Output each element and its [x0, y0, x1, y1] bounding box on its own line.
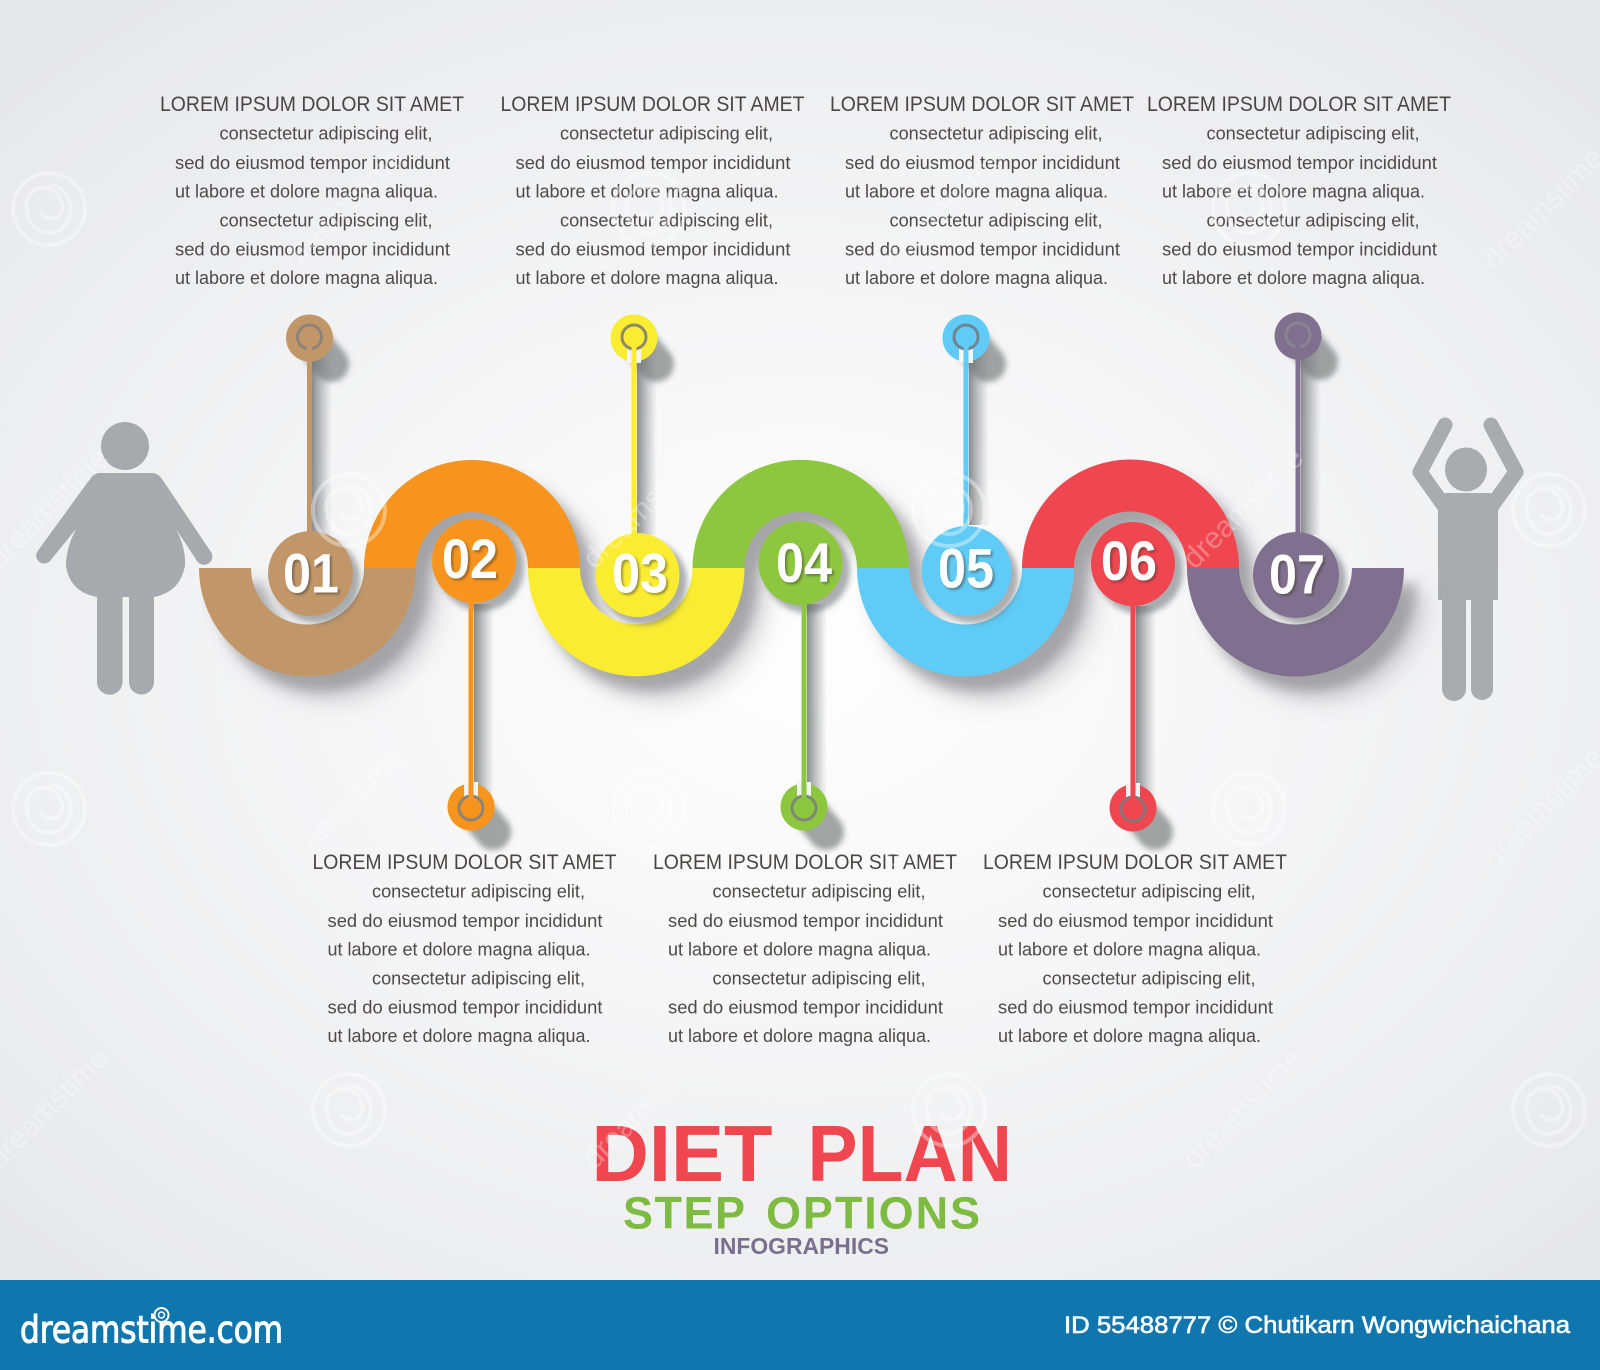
subtitle: step options — [623, 1188, 980, 1238]
step 05 — [922, 314, 1012, 616]
text block 5: sed do eiusmod tempor incididunt — [845, 153, 1120, 173]
step 07 — [1253, 312, 1339, 618]
segment 1 brown — [199, 568, 416, 676]
wave shadow — [212, 474, 1428, 702]
icon: fit person with raised arms — [1420, 425, 1516, 701]
watermark layer — [0, 141, 1600, 1175]
text block 1: ut labore et dolore magna aliqua. — [175, 268, 438, 288]
text block 2: ut labore et dolore magna aliqua. — [328, 1026, 590, 1046]
title: diet plan: DIET — [592, 1109, 773, 1198]
watermark layer: dreamstime — [576, 441, 710, 575]
text block 3 — [500, 93, 805, 288]
text block 5: consectetur adipiscing elit, — [890, 210, 1102, 230]
watermark layer: dreamstime — [1176, 1041, 1310, 1175]
text block 6: sed do eiusmod tempor incididunt — [998, 998, 1273, 1018]
disc 07 — [1253, 532, 1339, 618]
subtitle: step options: OPTIONS — [766, 1188, 980, 1238]
text block 2: ut labore et dolore magna aliqua. — [328, 940, 590, 960]
text block 7: ut labore et dolore magna aliqua. — [1162, 182, 1425, 202]
number 04: 04 — [776, 531, 832, 594]
text block 1: sed do eiusmod tempor incididunt — [175, 153, 450, 173]
disc 01 — [268, 531, 353, 616]
text block 7: LOREM IPSUM DOLOR SIT AMET — [1147, 93, 1451, 116]
segment 3 yellow — [528, 568, 744, 676]
number 06: 06 — [1101, 529, 1157, 592]
text block 1: ut labore et dolore magna aliqua. — [175, 182, 438, 202]
text block 7 — [1147, 93, 1451, 288]
footer credit: ID 55488777 © Chutikarn Wongwichaichana — [1064, 1312, 1571, 1339]
text block 5: ut labore et dolore magna aliqua. — [845, 268, 1108, 288]
pin 04 — [780, 600, 828, 830]
number 07: 07 — [1269, 542, 1325, 606]
pin 01 — [286, 314, 333, 534]
text block 2: consectetur adipiscing elit, — [372, 968, 585, 988]
step 06 — [1091, 522, 1175, 832]
watermark layer: dreamstime — [1176, 441, 1310, 575]
text block 7: ut labore et dolore magna aliqua. — [1162, 268, 1425, 288]
pin 06 — [1110, 600, 1156, 832]
text block 3: ut labore et dolore magna aliqua. — [516, 182, 778, 202]
text block 7: sed do eiusmod tempor incididunt — [1162, 240, 1437, 260]
text block 3: consectetur adipiscing elit, — [560, 124, 773, 144]
winding ribbon — [199, 460, 1404, 676]
step 02 — [432, 519, 516, 830]
disc 02 — [432, 519, 516, 603]
footer logo: dreamstime.com — [20, 1308, 283, 1352]
text block 3: ut labore et dolore magna aliqua. — [516, 268, 778, 288]
step 04 — [758, 521, 842, 830]
text block 6 — [983, 851, 1287, 1046]
pin shadows — [311, 338, 1321, 832]
text block 4: sed do eiusmod tempor incididunt — [668, 998, 943, 1018]
text block 1: sed do eiusmod tempor incididunt — [175, 240, 450, 260]
text block 5: LOREM IPSUM DOLOR SIT AMET — [830, 93, 1134, 116]
pin 05 — [942, 314, 990, 530]
number 05: 05 — [938, 536, 994, 600]
text block 6: ut labore et dolore magna aliqua. — [998, 1026, 1261, 1046]
text block 5: sed do eiusmod tempor incididunt — [845, 240, 1120, 260]
disc 05 — [922, 526, 1012, 616]
watermark layer: dreamstime — [276, 741, 410, 875]
text block 7: consectetur adipiscing elit, — [1206, 124, 1420, 144]
text block 7: sed do eiusmod tempor incididunt — [1162, 153, 1437, 173]
disc 03 — [596, 533, 680, 617]
text block 4: consectetur adipiscing elit, — [712, 882, 926, 902]
text block 2: sed do eiusmod tempor incididunt — [328, 911, 602, 931]
text block 4: LOREM IPSUM DOLOR SIT AMET — [653, 851, 957, 874]
text block 1: consectetur adipiscing elit, — [220, 210, 432, 230]
step 03 — [596, 314, 680, 617]
text block 2: consectetur adipiscing elit, — [372, 882, 585, 902]
number 02: 02 — [442, 527, 498, 590]
watermark layer: dreamstime — [576, 1041, 710, 1175]
text block 1 — [160, 93, 464, 288]
subtitle: step options: STEP — [623, 1188, 745, 1238]
watermark layer: dreamstime — [876, 741, 1010, 875]
text block 1: LOREM IPSUM DOLOR SIT AMET — [160, 93, 464, 116]
text block 6: consectetur adipiscing elit, — [1042, 968, 1256, 988]
text block 4 — [653, 851, 957, 1046]
text block 4: sed do eiusmod tempor incididunt — [668, 911, 943, 931]
text block 6: consectetur adipiscing elit, — [1042, 882, 1256, 902]
text block 5 — [830, 93, 1134, 288]
text block 2: LOREM IPSUM DOLOR SIT AMET — [312, 851, 617, 874]
text block 1: consectetur adipiscing elit, — [220, 124, 432, 144]
pin 03 — [610, 314, 658, 537]
disc 04 — [758, 521, 842, 605]
number 01: 01 — [283, 542, 339, 604]
number 03: 03 — [612, 542, 668, 604]
step 01 — [268, 314, 353, 616]
text block 6: ut labore et dolore magna aliqua. — [998, 940, 1261, 960]
text block 3: sed do eiusmod tempor incididunt — [516, 240, 790, 260]
segment 5 blue — [857, 568, 1074, 676]
text block 4: ut labore et dolore magna aliqua. — [668, 940, 931, 960]
text block 5: ut labore et dolore magna aliqua. — [845, 182, 1108, 202]
text block 5: consectetur adipiscing elit, — [890, 124, 1102, 144]
number disc shadows — [274, 525, 1346, 625]
text block 3: consectetur adipiscing elit, — [560, 210, 773, 230]
disc 06 — [1091, 522, 1175, 606]
text block 2 — [312, 851, 617, 1046]
footer bar — [0, 1280, 1600, 1370]
segment 6 red — [1022, 460, 1239, 568]
icon: overweight person — [36, 422, 212, 695]
pin 07 — [1274, 312, 1322, 536]
pin 02 — [448, 600, 494, 830]
segment 4 green — [692, 460, 909, 568]
title: diet plan — [592, 1109, 1012, 1198]
text block 4: consectetur adipiscing elit, — [712, 968, 926, 988]
title: diet plan: PLAN — [808, 1109, 1012, 1198]
text block 3: LOREM IPSUM DOLOR SIT AMET — [500, 93, 805, 116]
text block 6: LOREM IPSUM DOLOR SIT AMET — [983, 851, 1287, 874]
subtitle: infographics: INFOGRAPHICS — [714, 1233, 889, 1259]
segment 7 purple — [1187, 568, 1404, 676]
text block 2: sed do eiusmod tempor incididunt — [328, 998, 602, 1018]
watermark layer: dreamstime — [876, 141, 1010, 275]
text block 7: consectetur adipiscing elit, — [1206, 210, 1420, 230]
watermark layer: dreamstime — [276, 141, 410, 275]
segment 2 orange — [364, 460, 580, 568]
text block 3: sed do eiusmod tempor incididunt — [516, 153, 790, 173]
text block 6: sed do eiusmod tempor incididunt — [998, 911, 1273, 931]
text block 4: ut labore et dolore magna aliqua. — [668, 1026, 931, 1046]
